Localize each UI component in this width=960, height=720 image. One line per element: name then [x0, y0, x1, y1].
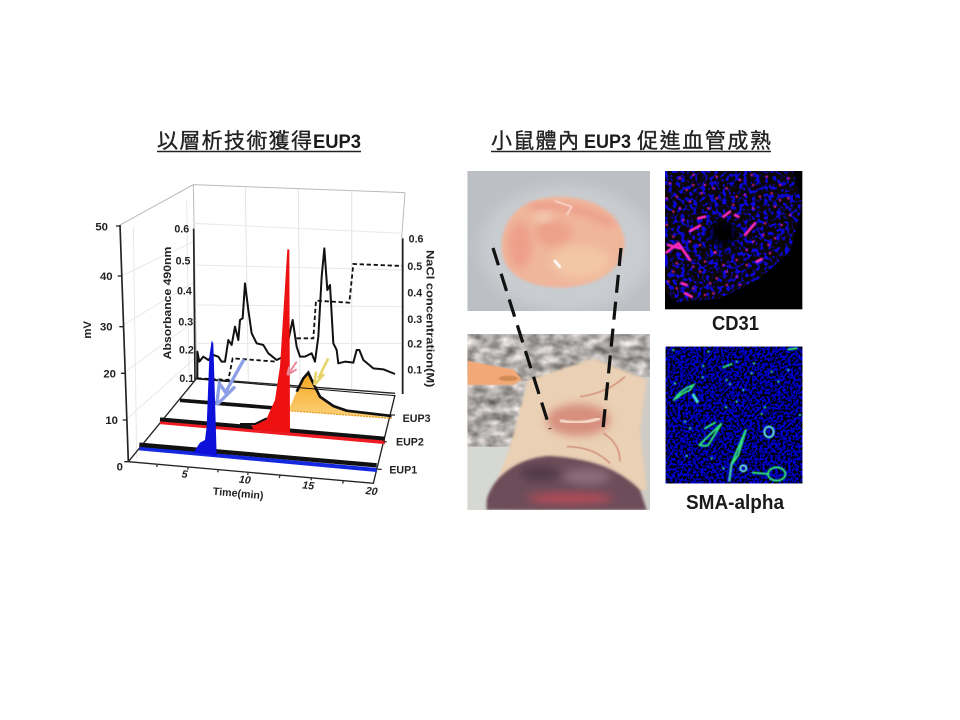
trace EUP2 with red peak [160, 249, 385, 442]
3D chromatogram chart [82, 185, 436, 502]
NaCl axis: 0.6 [409, 233, 424, 245]
absorbance axis: 0.5 [176, 255, 191, 267]
floor and time axis: 10 [238, 474, 251, 487]
title: mouse angiogenesis [491, 130, 771, 153]
floor and time axis [128, 378, 395, 502]
NaCl axis: 0.2 [407, 339, 422, 351]
title: chromatography: EUP3 [313, 132, 361, 153]
arrow: pink [287, 362, 297, 375]
green vessels [673, 348, 800, 481]
left mV axis [82, 222, 128, 474]
foil background [467, 334, 650, 510]
absorbance axis: 0.3 [178, 316, 193, 328]
series labels: EUP2 [396, 436, 424, 448]
bright vessels [667, 212, 762, 297]
title: mouse angiogenesis: EUP3 [584, 132, 631, 153]
left mV axis: mV [82, 321, 94, 339]
photo: implant in mouse [467, 334, 650, 510]
zoom guide dashed lines [493, 248, 621, 429]
micrograph: CD31 [665, 171, 802, 309]
NaCl axis [403, 233, 436, 394]
left mV axis: 50 [95, 222, 108, 234]
absorbance axis: 0.2 [179, 345, 194, 357]
label: SMA-alpha: SMA-alpha [686, 492, 785, 514]
absorbance axis: 0.4 [177, 285, 192, 297]
dark organ [487, 456, 647, 510]
left mV axis: 30 [100, 322, 113, 334]
NaCl axis: 0.1 [407, 365, 422, 377]
tissue blob [502, 197, 625, 288]
series labels [378, 413, 431, 476]
absorbance axis: 0.6 [174, 223, 189, 235]
title: mouse angiogenesis: 小鼠體內 [491, 130, 579, 153]
skin flap [498, 358, 647, 491]
chart frame and grid [120, 185, 405, 458]
series labels: EUP1 [389, 464, 417, 476]
absorbance axis: 0.1 [179, 373, 194, 385]
trace EUP1 with blue peak [139, 341, 377, 470]
arrow: blue [217, 359, 244, 405]
NaCl axis: 0.5 [407, 261, 422, 273]
left mV axis: 0 [117, 462, 123, 474]
NaCl axis: NaCl concentration(M) [424, 250, 436, 388]
label: CD31: CD31 [712, 313, 759, 335]
infographic canvas [84, 130, 802, 513]
orange tube tip [467, 361, 522, 385]
trace EUP3 with orange peak [180, 373, 395, 418]
NaCl dashed trace [197, 264, 403, 380]
floor and time axis: 5 [181, 468, 189, 481]
NaCl axis: 0.3 [407, 314, 422, 326]
floor and time axis: 15 [302, 479, 316, 493]
title: chromatography: 以層析技術獲得 [157, 130, 312, 153]
photo: excised tissue plug [467, 171, 653, 312]
magenta cell dots [667, 175, 790, 297]
left mV axis: 20 [103, 368, 116, 380]
floor and time axis: 20 [364, 485, 378, 498]
left mV axis: 10 [105, 415, 118, 427]
absorbance trace [197, 248, 395, 379]
series labels: EUP3 [403, 413, 431, 425]
absorbance axis [162, 223, 195, 385]
micrograph: SMA-alpha [666, 347, 802, 483]
floor and time axis: Time(min) [212, 486, 264, 502]
NaCl axis: 0.4 [407, 287, 422, 299]
arrow: yellow [314, 358, 328, 385]
left mV axis: 40 [100, 271, 113, 283]
title: mouse angiogenesis: 促進血管成熟 [637, 130, 771, 153]
dark tissue void [710, 221, 737, 246]
absorbance axis: Absorbance 490nm [162, 247, 174, 359]
